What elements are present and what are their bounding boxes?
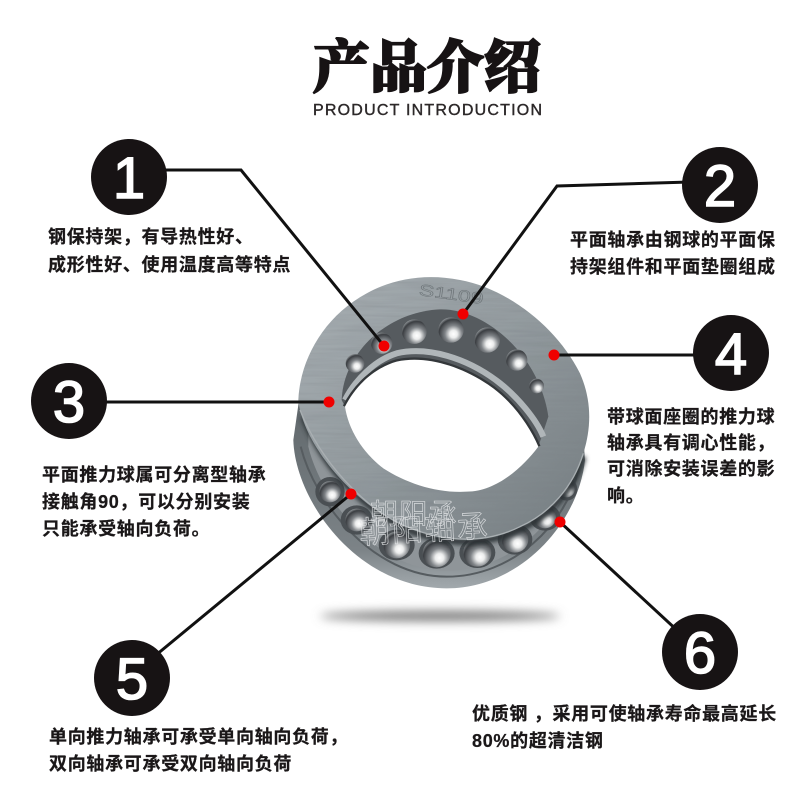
number badge 3: 3 xyxy=(53,370,85,435)
text 6: 80%的超清洁钢 xyxy=(472,731,604,751)
number badge 4 xyxy=(693,315,769,391)
text 3: 接触角90，可以分别安装 xyxy=(42,492,250,512)
number badge 6: 6 xyxy=(684,621,716,686)
number badge 5: 5 xyxy=(116,647,148,712)
marker 1 xyxy=(378,340,390,352)
leader line 2 xyxy=(463,182,690,314)
washer lower edge highlight xyxy=(300,410,583,539)
marker 4 xyxy=(548,350,560,360)
centre hole xyxy=(345,360,538,492)
callout 6 xyxy=(472,516,777,751)
race opening xyxy=(342,309,548,447)
text 5: 单向推力轴承可承受单向轴向负荷， xyxy=(49,726,348,747)
upper balls xyxy=(346,317,544,393)
callout 3 xyxy=(31,363,334,539)
callout 1 xyxy=(48,139,390,352)
number badge 5 xyxy=(94,640,170,716)
upper washer xyxy=(298,277,589,539)
model number: S1109 xyxy=(418,282,485,308)
leader line 1 xyxy=(160,170,384,346)
text 4: 可消除安装误差的影 xyxy=(607,458,775,479)
text 3: 平面推力球属可分离型轴承 xyxy=(42,464,266,485)
marker 6 xyxy=(554,516,566,528)
text 1: 钢保持架，有导热性好、 xyxy=(48,227,254,247)
text 1: 成形性好、使用温度高等特点 xyxy=(48,254,291,275)
text 4: 轴承具有调心性能， xyxy=(607,433,775,453)
title: 产品介绍 xyxy=(313,22,541,104)
marker 2 xyxy=(458,308,468,320)
leader line 4 xyxy=(554,354,700,356)
text 6: 优质钢 ，采用可使轴承寿命最高延长 xyxy=(472,703,777,724)
text 2: 持架组件和平面垫圈组成 xyxy=(570,256,776,277)
raceway rim xyxy=(345,351,543,437)
number badge 2: 2 xyxy=(704,154,736,219)
number badge 1: 1 xyxy=(113,146,145,211)
leader line 6 xyxy=(560,522,680,633)
marker 3 xyxy=(324,396,334,408)
number badge 4: 4 xyxy=(715,322,747,387)
lower washer and cage xyxy=(293,393,585,588)
bearing photo xyxy=(293,277,589,621)
watermark: 朝阳轴承 xyxy=(358,501,489,552)
text 4: 带球面座圈的推力球 xyxy=(607,406,775,427)
text 5: 双向轴承可承受双向轴向负荷 xyxy=(49,753,292,774)
watermark: 朝阳承 xyxy=(370,492,457,532)
callout 2 xyxy=(458,147,776,320)
text 2: 平面轴承由钢球的平面保 xyxy=(570,230,776,250)
marker 5 xyxy=(346,488,356,500)
subtitle: PRODUCT INTRODUCTION xyxy=(313,102,542,119)
text 4: 响。 xyxy=(607,486,644,506)
number badge 3 xyxy=(31,363,107,439)
number badge 1 xyxy=(91,139,167,215)
callout 5 xyxy=(49,488,356,774)
leader line 5 xyxy=(150,494,351,660)
lower balls xyxy=(315,477,577,569)
callout 4 xyxy=(548,315,775,506)
cast shadow of upper washer xyxy=(303,417,583,542)
text 3: 只能承受轴向负荷。 xyxy=(42,518,210,539)
number badge 6 xyxy=(662,614,738,690)
number badge 2 xyxy=(682,147,758,223)
ground shadow xyxy=(320,611,560,621)
leader line 3 xyxy=(100,400,329,404)
